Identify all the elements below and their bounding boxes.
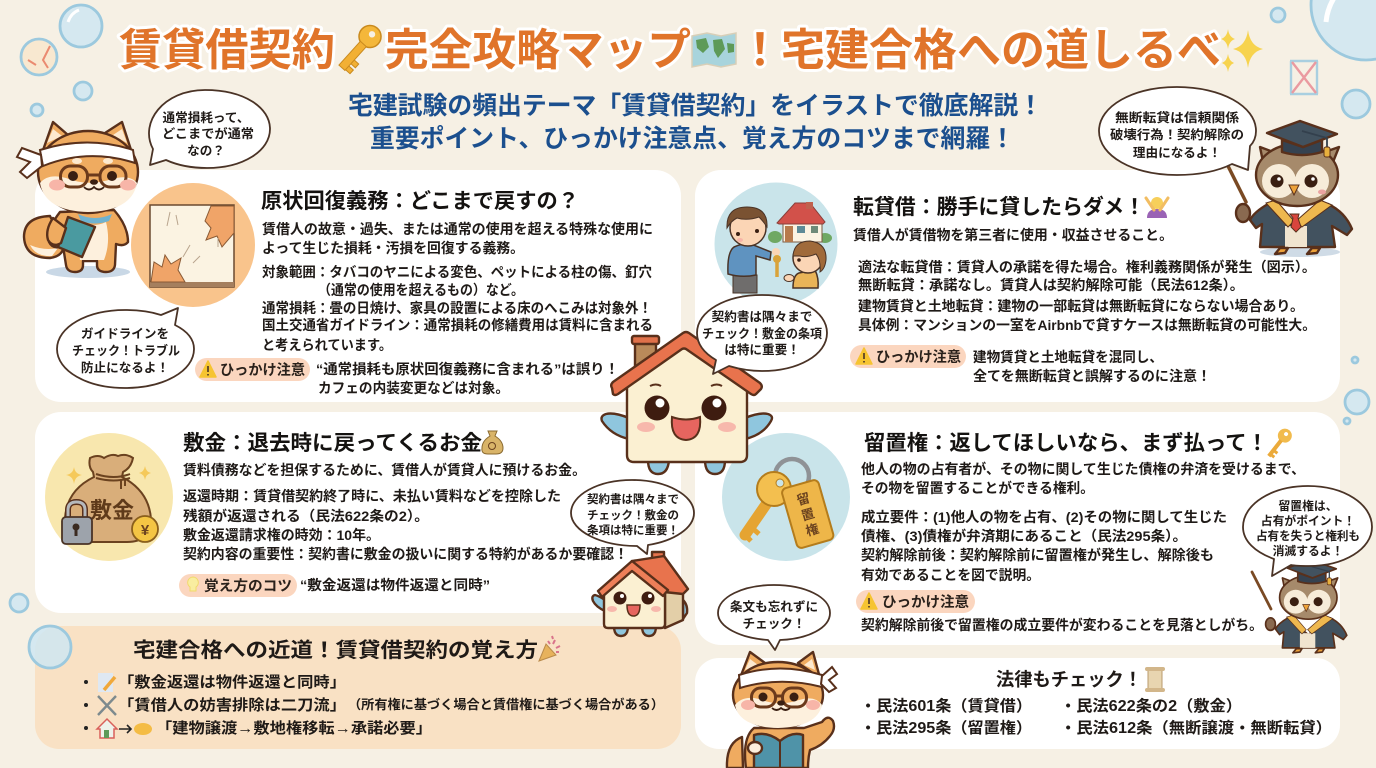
list item 1: 「敷金返還は物件返還と同時」 xyxy=(118,673,346,691)
icon: people and house xyxy=(714,182,838,306)
law list right xyxy=(1060,696,1332,737)
text block: trap: 全てを無断転貸と誤解するのに注意！ xyxy=(973,368,1211,384)
icon: money bag with lock and coin: 敷金 xyxy=(90,498,134,523)
speech bubble: shiba bottom: 条文も忘れずに xyxy=(730,599,818,614)
badge: ひっかけ注意: ひっかけ注意 xyxy=(220,361,305,379)
icon: key in title xyxy=(334,21,386,75)
law list left: ・民法601条（賃貸借） xyxy=(860,696,1032,715)
panel: 覚え方 xyxy=(35,626,681,749)
title: 完全攻略マップ xyxy=(385,26,691,75)
decorative bubble over panel xyxy=(29,626,71,668)
icon: money bag with lock and coin xyxy=(45,433,173,561)
pointer: small owl xyxy=(1252,572,1271,609)
law list left xyxy=(860,696,1032,737)
text block: definition xyxy=(262,221,653,256)
speech bubble: small owl: 占有を失うと権利も xyxy=(1256,529,1360,543)
speech bubble: small owl: 占有がポイント！ xyxy=(1261,514,1355,528)
badge: ひっかけ注意: ひっかけ注意 xyxy=(876,348,961,366)
speech bubble: small owl: 留置権は、 xyxy=(1278,499,1338,513)
speech bubble: small house: 契約書は隅々まで xyxy=(587,492,679,506)
speech bubble: shiba bottom: チェック！ xyxy=(743,617,805,631)
text block: details: 有効であることを図で説明。 xyxy=(861,567,1040,583)
text block: trap: 契約解除前後で留置権の成立要件が変わることを見落としがち。 xyxy=(861,617,1263,633)
speech bubble: shiba top xyxy=(149,90,270,168)
icon: money bag with lock and coin: ¥ xyxy=(141,522,150,539)
list item 3: 「建物譲渡→敷地権移転→承諾必要」 xyxy=(156,719,432,737)
title xyxy=(119,21,1263,75)
icon: small money bag xyxy=(482,431,503,454)
text block: tip: “敷金返還は物件返還と同時” xyxy=(300,577,490,593)
text block: details: 建物賃貸と土地転貸：建物の一部転貸は無断転貸にならない場合あり。 xyxy=(858,298,1304,314)
text block: trap: “通常損耗も原状回復義務に含まれる”は誤り！ xyxy=(316,361,619,377)
badge: ひっかけ注意: ひっかけ注意 xyxy=(882,593,969,611)
text block: trap xyxy=(973,349,1211,384)
subtitle: 重要ポイント、ひっかけ注意点、覚え方のコツまで網羅！ xyxy=(370,125,1015,153)
subtitle xyxy=(348,92,1043,153)
speech bubble: small house: 条項は特に重要！ xyxy=(587,523,679,537)
badge: 覚え方のコツ xyxy=(179,574,297,597)
panel: 法律もチェック xyxy=(695,658,1340,749)
panel: 留置権 xyxy=(695,412,1340,645)
text block: trap xyxy=(316,361,619,396)
list item 2: 「賃借人の妨害排除は二刀流」 xyxy=(118,696,346,714)
pointer: owl top xyxy=(1225,160,1246,202)
icon: key and tag: 権 xyxy=(804,521,821,539)
badge: ひっかけ注意 xyxy=(856,590,975,613)
character: house mascot xyxy=(602,332,772,474)
speech bubble: guideline: 防止になるよ！ xyxy=(81,360,169,375)
text block: details: 債権、(3)債権が弁済期にあること（民法295条）。 xyxy=(861,528,1187,544)
heading: 法律もチェック！ xyxy=(996,669,1142,690)
text block: definition: よって生じた損耗・汚損を回復する義務。 xyxy=(262,240,524,256)
icon: damaged wall xyxy=(131,183,255,307)
speech bubble: small house: チェック！敷金の xyxy=(587,508,679,522)
text block: details: 成立要件：(1)他人の物を占有、(2)その物に関して生じた xyxy=(861,509,1227,525)
icon: key and tag: 置 xyxy=(800,506,816,524)
speech bubble: house xyxy=(697,295,827,374)
text block: details: 残額が返還される（民法622条の2）。 xyxy=(183,508,429,524)
speech bubble: house: は特に重要！ xyxy=(724,342,800,357)
text block: details: 契約内容の重要性：契約書に敷金の扱いに関する特約があるか要確認！ xyxy=(183,546,628,562)
speech bubble: owl top: 破壊行為！契約解除の xyxy=(1110,127,1244,142)
text block: definition: 賃料債務などを担保するために、賃借人が賃貸人に預けるお金。 xyxy=(183,462,586,478)
panel: 転貸借 xyxy=(695,170,1340,402)
speech bubble: owl top: 理由になるよ！ xyxy=(1133,145,1221,160)
speech bubble: shiba top: どこまでが通常 xyxy=(162,126,254,141)
title: 賃貸借契約 xyxy=(119,26,335,75)
text block: trap: 建物賃貸と土地転貸を混同し、 xyxy=(973,349,1163,365)
text block: details xyxy=(861,509,1227,583)
text block: details: 具体例：マンションの一室をAirbnbで貸すケースは無断転貸の可能性大。 xyxy=(858,317,1316,333)
speech bubble: small house xyxy=(571,480,694,554)
text block: definition: その物を留置することができる権利。 xyxy=(861,480,1094,496)
text block: details xyxy=(183,488,628,562)
subtitle: 宅建試験の頻出テーマ「賃貸借契約」をイラストで徹底解説！ xyxy=(348,92,1043,120)
character: shiba top-left xyxy=(17,122,138,278)
text block: details: 返還時期：賃貸借契約終了時に、未払い賃料などを控除した xyxy=(183,488,561,504)
character: small owl xyxy=(1266,560,1347,653)
panel: 敷金 xyxy=(35,412,681,613)
law list right: ・民法622条の2（敷金） xyxy=(1060,696,1242,715)
heading: 敷金：退去時に戻ってくるお金 xyxy=(183,431,482,455)
speech bubble: shiba bottom xyxy=(718,585,830,650)
text block: details xyxy=(858,259,1316,333)
text block: definition: 他人の物の占有者が、その物に関して生じた債権の弁済を受けるまで、 xyxy=(861,461,1305,477)
speech bubble: guideline xyxy=(57,308,194,388)
icon: small key xyxy=(1263,426,1295,460)
list item 3 xyxy=(84,719,432,738)
text block: details: 契約解除前後：契約解除前に留置権が発生し、解除後も xyxy=(861,547,1214,563)
text block: details xyxy=(262,264,653,353)
decorative soap bubbles xyxy=(10,0,1376,612)
text block: details: 敷金返還請求権の時効：10年。 xyxy=(183,527,380,543)
speech bubble: house: チェック！敷金の条項 xyxy=(702,326,822,341)
text block: details: 国土交通省ガイドライン：通常損耗の修繕費用は賃料に含まれる xyxy=(262,317,653,333)
text block: details: 適法な転貸借：賃貸人の承諾を得た場合。権利義務関係が発生（図示）。 xyxy=(858,259,1316,275)
icon: sparkles in title xyxy=(1221,29,1263,72)
badge: ひっかけ注意 xyxy=(850,345,966,368)
title: 宅建合格への道しるべ xyxy=(781,26,1221,75)
icon: key and tag xyxy=(722,433,850,561)
list item 2 xyxy=(84,696,664,715)
text block: details: 無断転貸：承諾なし。賃貸人は契約解除可能（民法612条）。 xyxy=(858,277,1244,293)
speech bubble: guideline: チェック！トラブル xyxy=(72,343,180,358)
character: small house xyxy=(592,552,688,636)
heading: 宅建合格への近道！賃貸借契約の覚え方 xyxy=(133,638,538,662)
badge: ひっかけ注意 xyxy=(195,358,310,381)
icon: party popper xyxy=(539,636,560,661)
character: owl top-right xyxy=(1236,121,1352,257)
heading: 原状回復義務：どこまで戻すの？ xyxy=(261,190,579,213)
icon: world map in title xyxy=(692,33,736,67)
speech bubble: owl top xyxy=(1099,87,1256,175)
speech bubble: shiba top: なの？ xyxy=(187,144,225,158)
icon: key and tag: 留 xyxy=(795,490,812,508)
law list left: ・民法295条（留置権） xyxy=(860,718,1032,737)
title: ！ xyxy=(738,26,782,75)
speech bubble: small owl xyxy=(1243,486,1372,576)
text block: definition xyxy=(861,461,1305,496)
panel: 原状回復義務 xyxy=(35,170,681,402)
text block: trap: カフェの内装変更などは対象。 xyxy=(318,380,509,396)
badge: 覚え方のコツ: 覚え方のコツ xyxy=(204,577,292,595)
law list right: ・民法612条（無断譲渡・無断転貸） xyxy=(1060,718,1332,737)
text block: details: と考えられています。 xyxy=(262,337,392,353)
text block: details: 対象範囲：タバコのヤニによる変色、ペットによる柱の傷、釘穴 xyxy=(262,264,652,280)
text block: definition: 賃借人が賃借物を第三者に使用・収益させること。 xyxy=(853,227,1173,243)
character: shiba bottom xyxy=(727,652,837,768)
text block: details: （通常の使用を超えるもの）など。 xyxy=(318,282,524,298)
list item 2: （所有権に基づく場合と賃借権に基づく場合がある） xyxy=(348,697,664,712)
speech bubble: house: 契約書は隅々まで xyxy=(712,309,812,324)
speech bubble: guideline: ガイドラインを xyxy=(81,327,169,341)
speech bubble: owl top: 無断転貸は信頼関係 xyxy=(1115,110,1239,125)
speech bubble: shiba top: 通常損耗って、 xyxy=(163,110,249,125)
heading: 留置権：返してほしいなら、まず払って！ xyxy=(864,432,1268,455)
speech bubble: small owl: 消滅するよ！ xyxy=(1273,544,1343,558)
icon: crossed arms person xyxy=(1146,197,1168,218)
text block: definition: 賃借人の故意・過失、または通常の使用を超える特殊な使用に xyxy=(262,221,653,237)
heading: 転貸借：勝手に貸したらダメ！ xyxy=(853,195,1145,219)
icon: scroll xyxy=(1145,667,1165,692)
text block: details: 通常損耗：畳の日焼け、家具の設置による床のへこみは対象外！ xyxy=(262,300,652,316)
